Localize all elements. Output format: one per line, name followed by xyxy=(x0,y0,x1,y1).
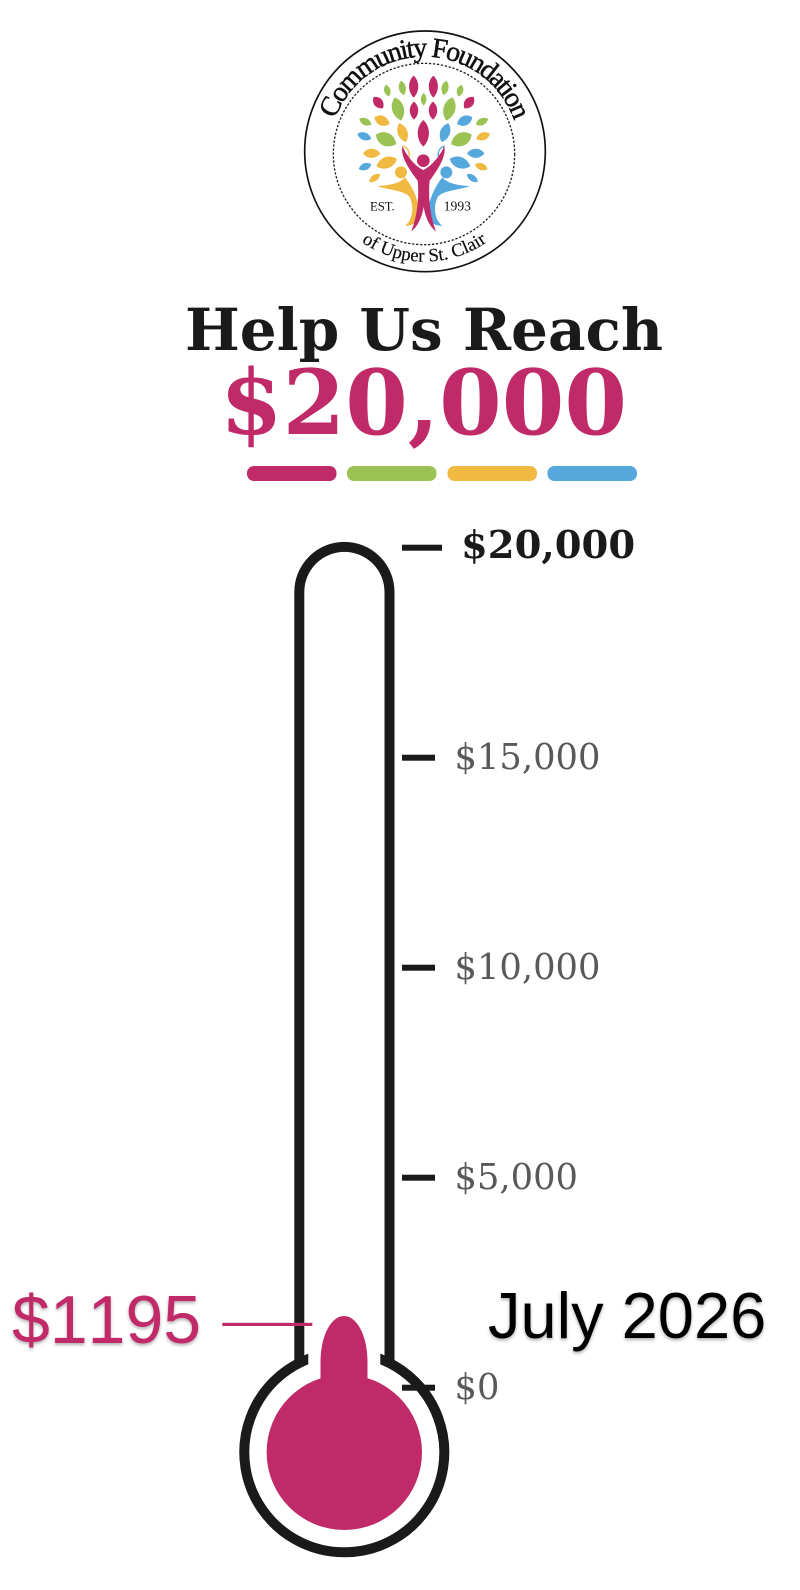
heading: Help Us Reach: Help Us Reach xyxy=(185,296,663,364)
mercury fill xyxy=(267,1316,422,1530)
thermometer bulb outline xyxy=(244,1355,444,1552)
current amount marker line xyxy=(222,1323,312,1326)
blue figure xyxy=(428,146,470,226)
heading: goal amount: $20,000 xyxy=(220,350,627,456)
scale label: $20,000: $20,000 xyxy=(461,523,635,568)
logo: Community Foundation of Upper St. Clair xyxy=(304,30,546,272)
logo outer ring xyxy=(305,31,545,272)
logo bottom text: of Upper St. Clair xyxy=(363,234,486,264)
current amount: $1195: $1195 xyxy=(12,1282,201,1358)
blue leaves xyxy=(356,113,484,184)
scale label: $15,000: $15,000 xyxy=(454,737,600,778)
colour bars xyxy=(247,466,637,481)
date: July 2026: July 2026 xyxy=(488,1279,766,1352)
crimson figure xyxy=(402,146,445,231)
logo top text: Community Foundation xyxy=(321,38,526,121)
yellow leaves xyxy=(363,113,491,184)
scale ticks xyxy=(402,545,442,1391)
logo 1993: 1993 xyxy=(444,199,471,214)
crimson leaves xyxy=(370,76,477,147)
yellow figure xyxy=(377,146,419,226)
scale label: $0: $0 xyxy=(454,1367,499,1408)
green leaves xyxy=(358,80,490,150)
thermometer xyxy=(244,547,444,1552)
logo EST.: EST. xyxy=(370,200,395,214)
thermometer tube xyxy=(299,547,390,1362)
scale label: $10,000: $10,000 xyxy=(454,947,600,988)
scale label: $5,000: $5,000 xyxy=(454,1157,578,1198)
logo dotted ring xyxy=(333,63,515,245)
